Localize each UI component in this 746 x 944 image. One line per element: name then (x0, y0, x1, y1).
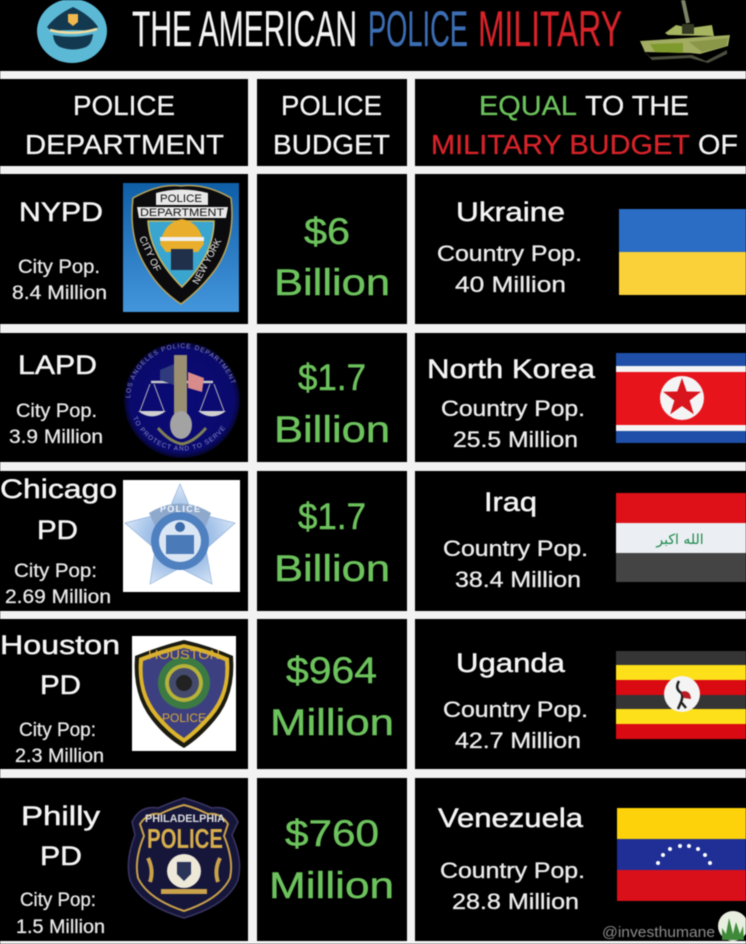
country: Ukraine (437, 197, 582, 297)
icon: Houston PD badge: POLICE (162, 711, 206, 725)
country: Venezuela: 28.8 Million (452, 889, 579, 914)
icon: Philadelphia police badge: PHILADELPHIA (145, 813, 225, 825)
budget: $964 million: Million (270, 702, 394, 743)
country: Iraq: 38.4 Million (455, 567, 581, 592)
budget: $1.7 billion: Billion (274, 409, 390, 450)
department label: Philly PD: City Pop: (20, 890, 96, 911)
icon: Iraq flag (616, 493, 746, 582)
icon: North Korea flag (616, 353, 746, 443)
budget: $6 billion (274, 211, 390, 303)
icon: Chicago PD star badge (123, 480, 240, 592)
country: Venezuela (438, 803, 585, 914)
budget: $1.7 billion: $1.7 (298, 357, 366, 398)
heading: police budget: POLICE (281, 90, 382, 121)
icon: NYPD badge: CITY OF (136, 235, 162, 274)
department label: LAPD: City Pop. (16, 401, 97, 422)
heading: police department (25, 90, 224, 160)
department label: Houston PD: 2.3 Million (15, 746, 104, 767)
country: North Korea: North Korea (427, 354, 596, 384)
heading: police budget: BUDGET (273, 129, 390, 160)
icon: Houston PD badge: HOUSTON (148, 647, 220, 662)
country: Uganda (443, 648, 588, 753)
department label: LAPD (9, 350, 103, 448)
icon: Iraq flag: الله اكبر (655, 532, 704, 548)
country: Uganda: Country Pop. (443, 697, 588, 722)
icon: Uganda flag (616, 651, 746, 739)
country: North Korea: 25.5 Million (453, 427, 578, 452)
title text: MILITARY (478, 1, 622, 57)
country: North Korea: Country Pop. (441, 396, 585, 421)
department label: Houston PD (0, 630, 120, 767)
panel: table header (0, 79, 746, 166)
heading: police budget (273, 90, 390, 160)
icon: NYPD badge: DEPARTMENT (140, 207, 224, 219)
department label: NYPD: City Pop. (18, 257, 100, 278)
department label: LAPD: LAPD (18, 350, 97, 380)
panel: Philly PD row (0, 778, 746, 941)
heading: equal to the military budget of: MILITARY BUDGET (431, 129, 690, 160)
heading: equal to the military budget of: EQUAL (479, 90, 577, 121)
country: Ukraine: Country Pop. (437, 241, 582, 266)
title text: THE AMERICAN (132, 1, 357, 57)
country: Uganda: 42.7 Million (455, 728, 581, 753)
panel: Houston PD row (0, 619, 746, 769)
budget: $6 billion: Billion (274, 262, 390, 303)
budget: $760 million: Million (269, 865, 394, 906)
country: Iraq: Iraq (484, 487, 537, 517)
icon: Philadelphia police badge (128, 798, 240, 918)
credit: @investhumane: @investhumane (602, 924, 715, 941)
department label: Philly PD (16, 801, 105, 938)
budget: $760 million (269, 813, 394, 906)
department label: Philly PD: 1.5 Million (16, 917, 105, 938)
department label: NYPD: NYPD (19, 197, 103, 227)
budget: $1.7 billion (274, 496, 390, 589)
department label: Chicago PD: City Pop: (14, 561, 97, 582)
budget: $1.7 billion: Billion (274, 548, 390, 589)
department label: Chicago PD (0, 474, 117, 608)
icon: NYPD badge: POLICE (160, 193, 202, 205)
panel: Chicago PD row (0, 471, 746, 611)
icon: Philadelphia police badge: POLICE (147, 823, 223, 854)
heading: police department: POLICE (73, 90, 175, 121)
icon: NYPD badge (123, 183, 239, 312)
icon: Chicago PD star badge: POLICE (160, 504, 200, 514)
heading: equal to the military budget of (431, 90, 738, 160)
country: Iraq: Country Pop. (443, 536, 588, 561)
heading: police department: DEPARTMENT (25, 129, 224, 160)
icon: LAPD seal (124, 342, 240, 458)
icon: LAPD seal: TO PROTECT AND TO SERVE (133, 416, 226, 452)
department label: LAPD: 3.9 Million (9, 427, 103, 448)
title banner (0, 0, 746, 71)
country: Iraq (443, 487, 588, 592)
icon: tank (640, 0, 730, 63)
panel: NYPD row (0, 174, 746, 324)
department label: Chicago PD: PD (37, 515, 78, 545)
department label: Houston PD: Houston (0, 630, 120, 660)
heading: equal to the military budget of: TO THE (585, 90, 689, 121)
country: North Korea (427, 354, 596, 452)
heading: equal to the military budget of: OF (698, 129, 738, 160)
department label: Chicago PD: 2.69 Million (5, 587, 111, 608)
icon: LAPD seal: LOS ANGELES POLICE DEPARTMENT (125, 342, 236, 398)
panel: LAPD row (0, 332, 746, 463)
icon: NYPD badge: NEW YORK (191, 237, 224, 286)
title text: POLICE (368, 1, 468, 57)
budget: $1.7 billion (274, 357, 390, 450)
icon: Ukraine flag (619, 209, 746, 295)
budget: $760 million: $760 (285, 813, 379, 854)
department label: NYPD (12, 197, 107, 304)
department label: Chicago PD: Chicago (0, 474, 117, 504)
department label: Houston PD: City Pop: (19, 720, 96, 741)
budget: $6 billion: $6 (304, 211, 350, 252)
department label: Philly PD: Philly (21, 801, 101, 831)
country: Venezuela: Country Pop. (440, 858, 585, 883)
budget: $964 million (270, 650, 394, 743)
department label: Houston PD: PD (40, 670, 81, 700)
country: Venezuela: Venezuela (438, 803, 584, 833)
icon: Venezuela flag (617, 808, 746, 901)
country: Uganda: Uganda (456, 648, 566, 678)
icon: police cap (37, 0, 107, 63)
department label: NYPD: 8.4 Million (12, 283, 107, 304)
department label: Philly PD: PD (40, 841, 82, 871)
icon: Houston PD badge (132, 636, 236, 751)
budget: $1.7 billion: $1.7 (298, 496, 366, 537)
country: Ukraine: Ukraine (456, 197, 565, 227)
budget: $964 million: $964 (286, 650, 377, 691)
icon: investhumane logo (718, 911, 746, 941)
country: Ukraine: 40 Million (455, 272, 566, 297)
